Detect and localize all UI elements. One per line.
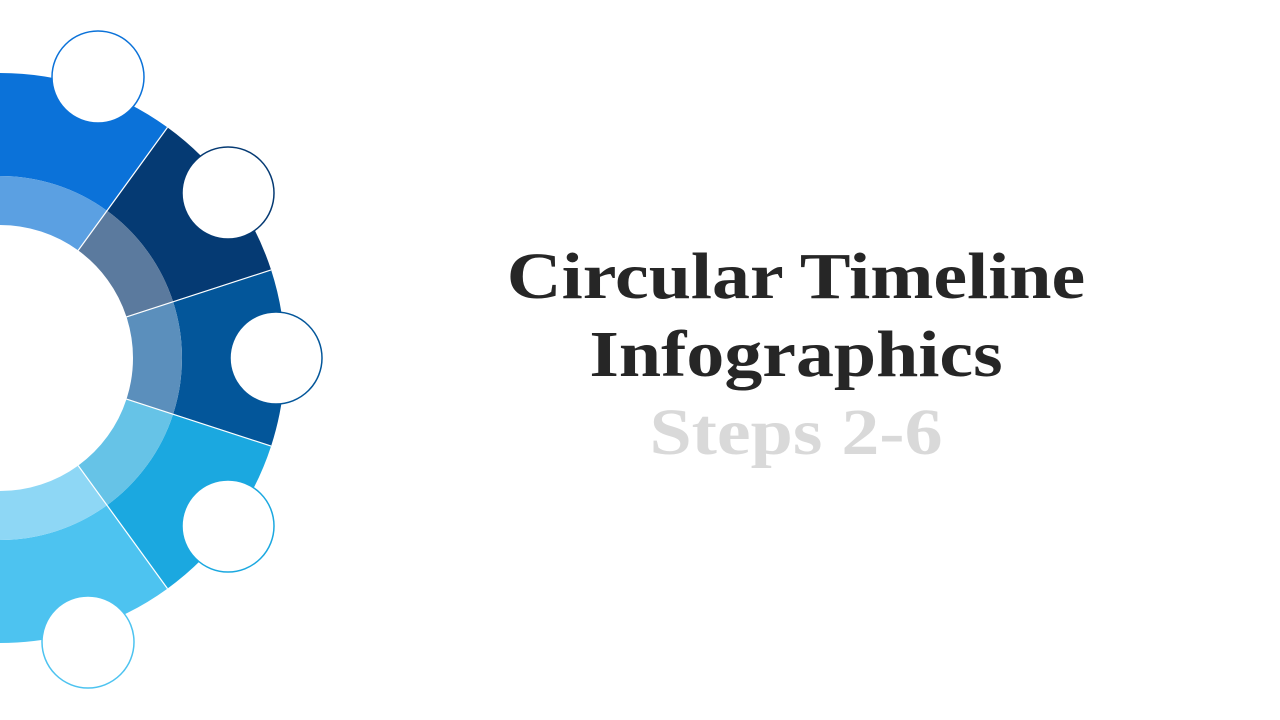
- marker circle 5: [42, 596, 134, 688]
- marker circle 4: [182, 480, 274, 572]
- segment 4: [78, 399, 271, 589]
- subtitle: Steps 2-6: [649, 396, 943, 469]
- marker circle 2: [182, 147, 274, 239]
- marker circle 1: [52, 31, 144, 123]
- segment 1: [0, 73, 168, 250]
- title: Circular Timeline: [507, 240, 1085, 313]
- segment 5: [0, 466, 168, 643]
- segment 2: [78, 127, 271, 317]
- title: [507, 240, 1085, 469]
- marker circle 3: [230, 312, 322, 404]
- title: Infographics: [589, 318, 1003, 391]
- segment 3: [126, 270, 285, 446]
